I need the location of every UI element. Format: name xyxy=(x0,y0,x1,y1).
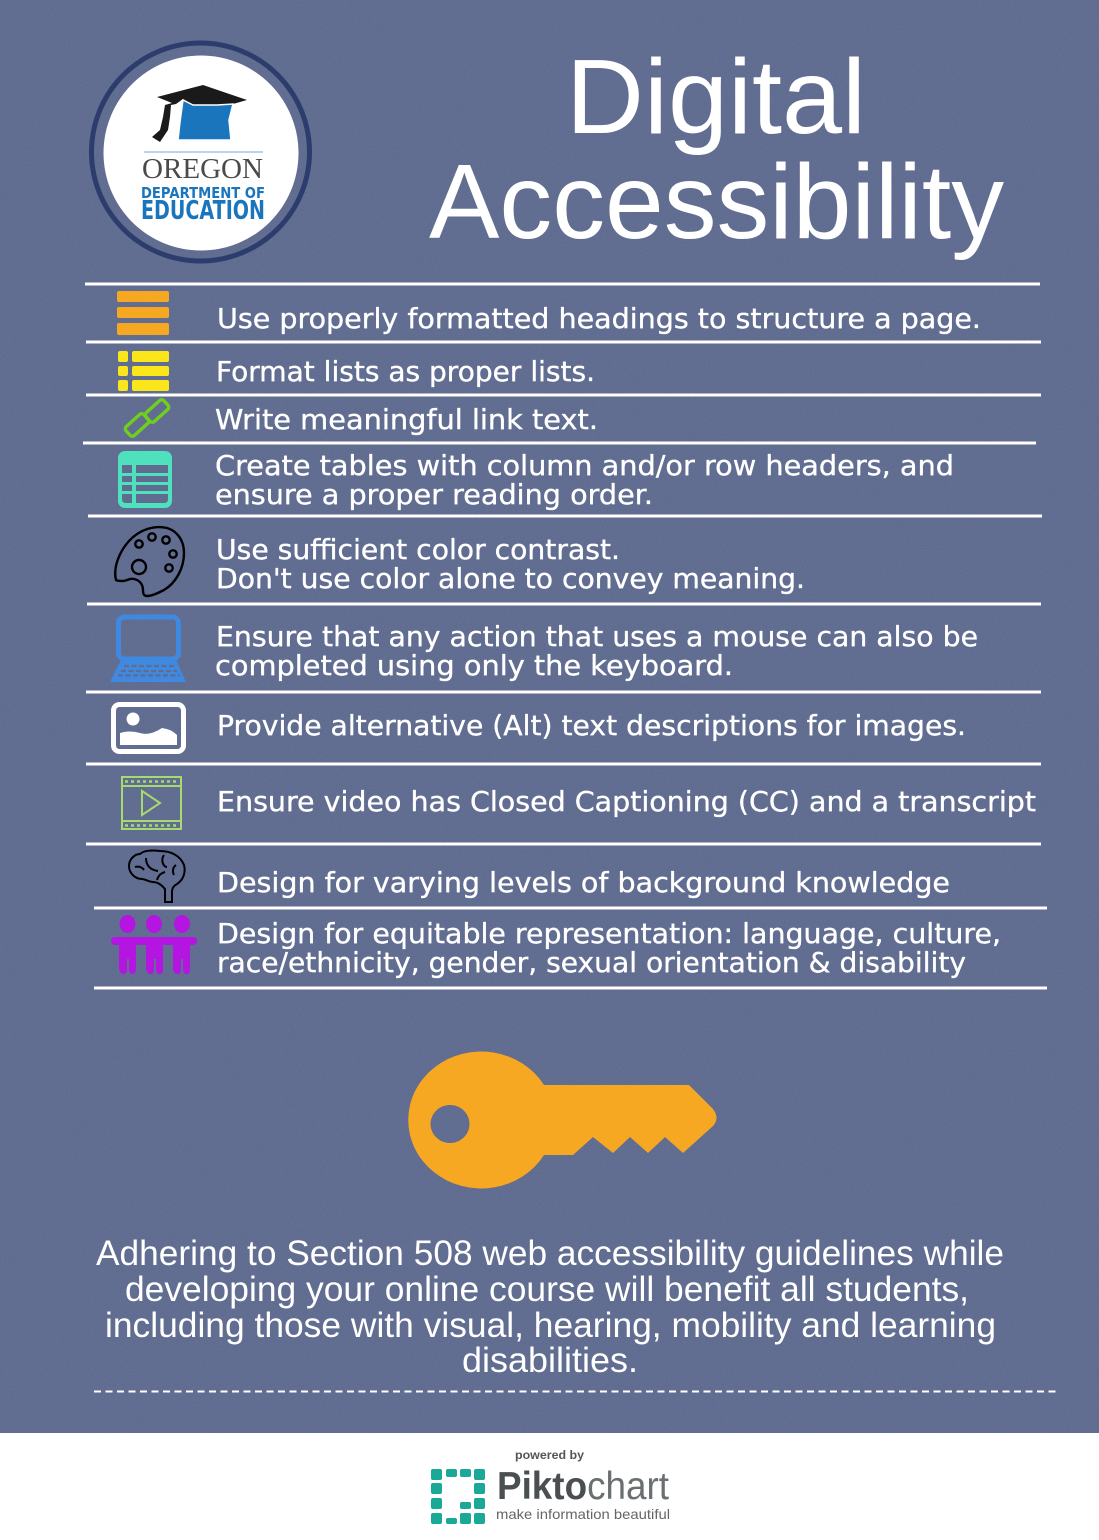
icon: graduation cap xyxy=(152,85,247,142)
icon: heading bars xyxy=(117,291,169,335)
icon: chain link xyxy=(124,399,170,437)
text: color contrast xyxy=(216,534,805,595)
item: video captions xyxy=(122,777,1036,829)
text: keyboard xyxy=(215,621,978,682)
title: Digital xyxy=(566,38,866,156)
text: Piktochart: Piktochart xyxy=(497,1465,669,1508)
title xyxy=(429,38,1004,261)
text: tables: ensure a proper reading order. xyxy=(215,479,653,511)
logo text: Oregon: OREGON xyxy=(142,154,263,185)
item: color contrast xyxy=(115,527,805,596)
icon: laptop xyxy=(110,617,186,682)
logo: Oregon Department of Education xyxy=(92,43,310,261)
text: equitable representation: race/ethnicity, gender, sexual orientation & disability xyxy=(217,947,966,979)
icon: image xyxy=(114,704,184,752)
icon: Piktochart logo xyxy=(431,1469,485,1524)
closing statement xyxy=(96,1234,1004,1380)
icon: table xyxy=(118,451,172,508)
text: alt text: Provide alternative (Alt) text descriptions for images. xyxy=(217,710,966,742)
closing statement: developing your online course will benefit all students, xyxy=(125,1270,969,1309)
item: tables xyxy=(118,450,954,511)
icon: video xyxy=(122,777,181,829)
text: equitable representation: Design for equitable representation: language, culture, xyxy=(217,918,1001,950)
item: links xyxy=(124,399,598,437)
icon: list xyxy=(118,351,169,391)
item: lists xyxy=(118,351,595,391)
text: color contrast: Don't use color alone to convey meaning. xyxy=(216,563,805,595)
logo text: Education: EDUCATION xyxy=(141,196,265,226)
item: headings xyxy=(117,291,981,335)
footer: Piktochart branding xyxy=(0,1433,1099,1540)
icon: Oregon state shape xyxy=(178,100,233,140)
closing statement: including those with visual, hearing, mobility and learning xyxy=(105,1306,996,1345)
text: powered by: powered by xyxy=(515,1448,584,1462)
text: background knowledge: Design for varying levels of background knowledge xyxy=(217,867,950,899)
icon: people xyxy=(111,915,197,974)
icon: brain xyxy=(129,850,185,902)
icon: key xyxy=(408,1052,716,1189)
text: tables: Create tables with column and/or row headers, and xyxy=(215,450,954,482)
item: equitable representation xyxy=(111,915,1001,979)
text: equitable representation xyxy=(217,918,1001,979)
text: keyboard: completed using only the keyboard. xyxy=(215,650,733,682)
item: alt text xyxy=(114,704,966,752)
closing statement: Adhering to Section 508 web accessibility guidelines while xyxy=(96,1234,1004,1273)
text: color contrast: Use sufficient color contrast. xyxy=(216,534,620,566)
text: lists: Format lists as proper lists. xyxy=(216,356,595,388)
logo text: Department of: DEPARTMENT OF xyxy=(141,184,265,202)
icon: palette xyxy=(115,527,184,596)
text: tables xyxy=(215,450,954,511)
text: tagline: make information beautiful xyxy=(496,1506,670,1522)
closing statement: disabilities. xyxy=(462,1341,638,1380)
item: background knowledge xyxy=(129,850,950,902)
text: headings: Use properly formatted headings to structure a page. xyxy=(217,303,981,335)
title: Accessibility xyxy=(429,143,1004,261)
text: keyboard: Ensure that any action that uses a mouse can also be xyxy=(216,621,978,653)
text: links: Write meaningful link text. xyxy=(215,404,598,436)
text: video captions: Ensure video has Closed Captioning (CC) and a transcript xyxy=(217,786,1036,818)
item: keyboard xyxy=(110,617,978,682)
